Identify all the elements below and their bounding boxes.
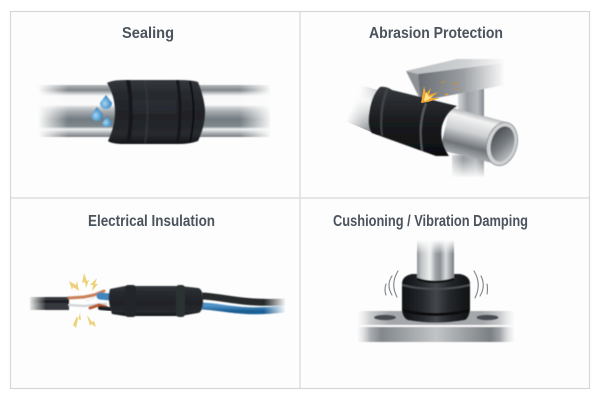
icon: vibration arcs	[385, 271, 488, 298]
icon: electric sparks	[69, 273, 98, 328]
illustration: base plate	[356, 310, 516, 343]
illustration: blade	[406, 59, 505, 101]
illustration: right tube	[440, 107, 522, 169]
panel: cushioning / vibration damping	[333, 213, 528, 343]
illustration: rubber bushing	[402, 274, 470, 322]
heading: abrasion protection: Abrasion Protection	[369, 25, 503, 42]
illustration: left tube	[325, 70, 385, 140]
illustration: heat-shrink sleeve	[109, 285, 203, 317]
illustration: exposed wires	[69, 291, 110, 309]
illustration: support post	[450, 88, 486, 178]
heading: electrical insulation: Electrical Insulation	[88, 213, 215, 230]
icon: sparks	[421, 81, 459, 103]
illustration: pipe	[38, 83, 272, 139]
illustration: left cable	[28, 295, 69, 312]
panel: abrasion protection	[325, 25, 522, 178]
illustration: right cables	[202, 294, 286, 318]
panel: electrical insulation	[28, 213, 286, 328]
icon: water drops	[91, 95, 112, 127]
panel: sealing	[38, 25, 272, 144]
heading: cushioning / vibration damping: Cushioning / Vibration Damping	[333, 213, 528, 230]
heading: sealing: Sealing	[122, 25, 174, 42]
illustration: rubber sleeve	[107, 80, 205, 144]
illustration: rubber sleeve	[369, 87, 457, 156]
illustration: vertical rod	[415, 240, 456, 282]
